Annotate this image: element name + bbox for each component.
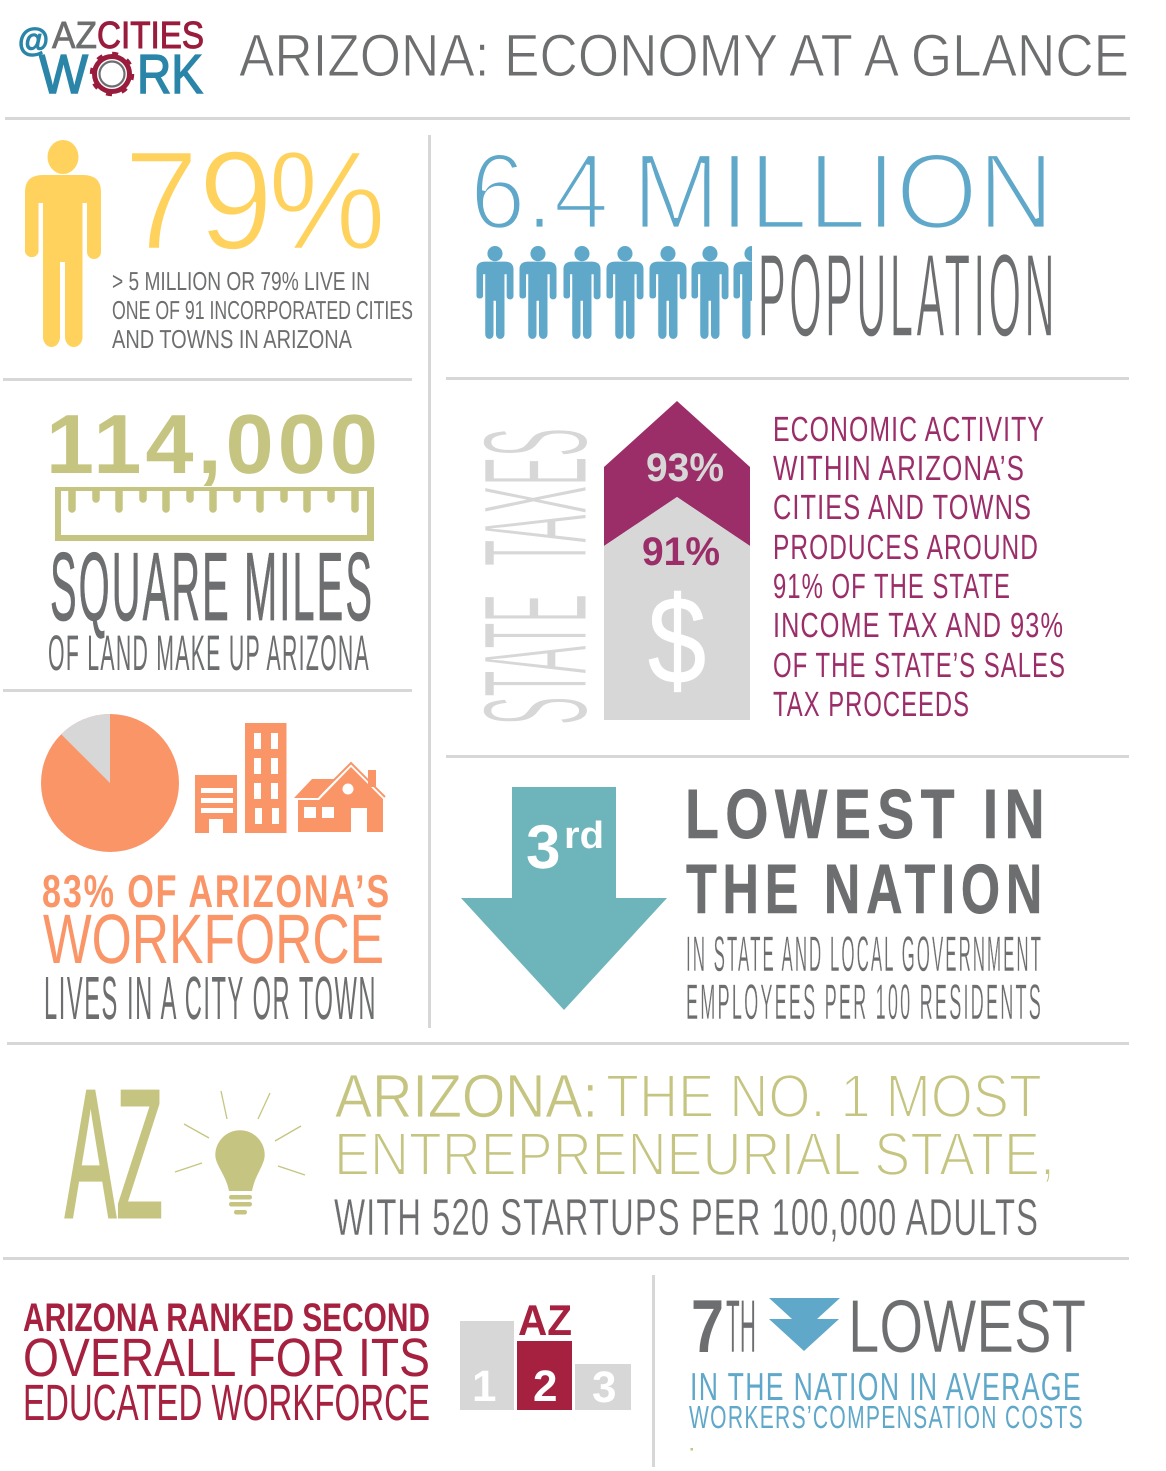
logo: AZ Cities @ Work: CITIES: [97, 15, 204, 57]
text: OF LAND MAKE UP ARIZONA: [48, 625, 370, 681]
graphic: house-shaped tax chart: [604, 401, 750, 720]
text: economic activity: 91% OF THE STATE: [773, 567, 1011, 606]
panel: 3rd lowest: [461, 775, 1051, 1030]
panel: workers compensation: [689, 1284, 1086, 1450]
chart: pie 83%: [41, 714, 179, 852]
panel: workforce: [41, 714, 391, 1032]
icon: tower: [245, 723, 286, 833]
icon: person: [25, 140, 101, 347]
panel: entrepreneurial: [65, 1051, 1055, 1256]
chart: podium: AZ: [518, 1297, 572, 1345]
icon: ruler: [55, 487, 374, 541]
arrow: 3rd: 3: [526, 813, 560, 882]
text: LIVES IN A CITY OR TOWN: [44, 964, 377, 1032]
text: cities description: > 5 MILLION OR 79% LIVE IN: [112, 266, 370, 296]
arrow: 3rd: [461, 787, 667, 1010]
panel: educated workforce: [23, 1296, 631, 1431]
chart: podium: 2: [533, 1362, 557, 1411]
text: ranked second: EDUCATED WORKFORCE: [23, 1374, 430, 1431]
heading: most entrepreneurial state: THE NO. 1 MOST: [606, 1062, 1042, 1130]
heading: lowest in the nation: LOWEST IN: [685, 775, 1051, 853]
icon: office building: [195, 775, 237, 833]
stat: 6.4 million: 6.4: [470, 130, 609, 252]
stat: 114,000: 114,000: [46, 397, 382, 491]
text: 7th: 7: [691, 1284, 724, 1368]
text: ranked second: ARIZONA RANKED SECOND: [23, 1296, 430, 1340]
text: government employees: [686, 926, 1043, 1030]
logo: AZ Cities @ Work: AZ: [52, 15, 97, 57]
stat: 6.4 million: MILLION: [632, 130, 1054, 252]
text: cities description: ONE OF 91 INCORPORATED CITIES: [112, 295, 413, 325]
icon: row of people: [476, 246, 770, 339]
arrow: 3rd: rd: [564, 815, 604, 857]
text: economic activity: TAX PROCEEDS: [773, 685, 970, 724]
text: 83% of Arizona's: 83% OF ARIZONA’S: [42, 865, 391, 917]
chart: podium: 1: [472, 1362, 496, 1411]
panel: state taxes: [451, 401, 1066, 725]
heading: lowest in the nation: [685, 775, 1051, 928]
text: cities description: AND TOWNS IN ARIZONA: [112, 324, 352, 354]
graphic: house-shaped tax chart: $: [648, 572, 706, 710]
label: state taxes: STATE: [451, 594, 619, 725]
text: economic activity: ECONOMIC ACTIVITY: [773, 410, 1045, 449]
panel: 79% live in cities: [25, 121, 413, 354]
text: economic activity: INCOME TAX AND 93%: [773, 606, 1064, 645]
heading: most entrepreneurial state: ARIZONA:: [335, 1062, 598, 1130]
stat: 79%: [124, 121, 386, 279]
chart: podium: 3: [592, 1363, 616, 1412]
graphic: house-shaped tax chart: 93%: [646, 446, 724, 490]
heading: most entrepreneurial state: [334, 1062, 1055, 1188]
heading: most entrepreneurial state: ENTREPRENEURIAL STATE,: [334, 1120, 1055, 1188]
logo: AZ Cities @ Work: [18, 15, 204, 105]
dot: [690, 1448, 693, 1450]
text: TAXES: [451, 428, 619, 566]
text: economic activity: CITIES AND TOWNS: [773, 488, 1032, 527]
text: economic activity: [773, 410, 1066, 724]
icon: house: [294, 763, 385, 832]
heading: workforce: WORKFORCE: [43, 900, 384, 978]
text: ranked second: OVERALL FOR ITS: [23, 1328, 430, 1388]
text: ranked second: [23, 1296, 430, 1431]
panel: population: [470, 130, 1058, 362]
logo: AZ Cities @ Work: @: [18, 21, 49, 58]
panel: entrepreneurial: AZ: [65, 1051, 163, 1256]
icon: down arrow: [769, 1298, 840, 1351]
logo: AZ Cities @ Work: W: [39, 43, 88, 105]
text: economic activity: PRODUCES AROUND: [773, 528, 1039, 567]
graphic: house-shaped tax chart: 91%: [642, 530, 720, 574]
stat: 79%: %: [268, 121, 386, 279]
text: cities description: [112, 266, 413, 354]
stat: 79%: 79: [124, 121, 273, 279]
panel: square miles: [46, 397, 382, 681]
text: SQUARE MILES: [50, 532, 374, 641]
icon: light bulb: [175, 1091, 305, 1214]
text: economic activity: WITHIN ARIZONA’S: [773, 449, 1025, 488]
chart: podium: [460, 1297, 631, 1412]
logo: AZ Cities @ Work: RK: [137, 43, 203, 105]
panel: workers compensation: TH: [726, 1284, 756, 1368]
text: lowest: LOWEST: [848, 1284, 1086, 1368]
label: state taxes: [451, 428, 619, 725]
